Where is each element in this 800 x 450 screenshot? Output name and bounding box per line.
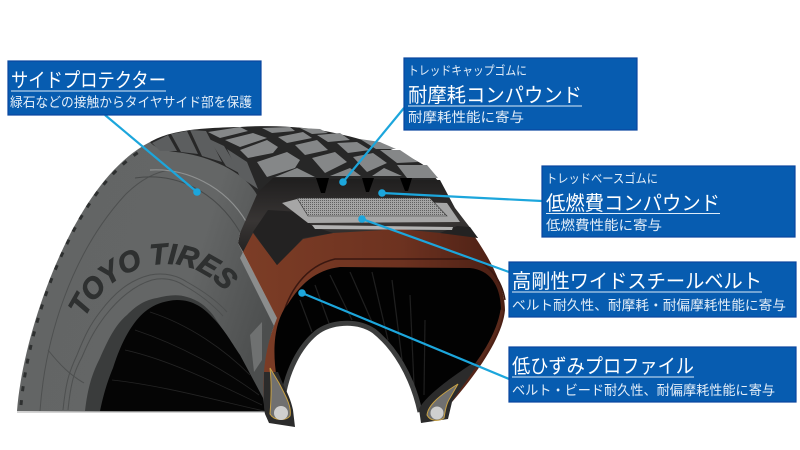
callout: tread cap compound: [339, 58, 637, 186]
description: 低燃費性能に寄与: [546, 217, 662, 233]
right sidewall ply: [462, 310, 502, 382]
callout: side protector: [8, 61, 261, 196]
shoulder lug blocks: [152, 130, 258, 189]
steel belt plate: [282, 199, 460, 223]
inner ply line: [281, 259, 505, 322]
leader line: [105, 115, 197, 192]
inner ply ridges in opening: [112, 312, 264, 411]
left rubber wedge: [253, 210, 333, 265]
description: ベルト・ビード耐久性、耐偏摩耗性能に寄与: [512, 383, 775, 398]
inner liner ribs: [300, 272, 425, 395]
tread cross-section: [238, 178, 478, 265]
sidewall edge lugs: [21, 150, 142, 405]
bead right: [419, 362, 479, 423]
sidewall ribs: [40, 170, 247, 411]
callout: low strain profile: [298, 289, 796, 402]
light edge along cut: [240, 252, 277, 326]
heading: サイドプロテクター: [11, 69, 166, 92]
brand lettering: [85, 264, 240, 318]
leader dot: [358, 215, 366, 223]
heading: 高剛性ワイドスチールベルト: [512, 270, 762, 293]
bottom cut line: [17, 411, 265, 413]
leader dot: [378, 189, 386, 197]
panel background: [8, 61, 261, 115]
panel background: [509, 347, 796, 402]
panel background: [404, 58, 637, 130]
panel background: [509, 262, 796, 317]
caption: トレッドキャップゴムに: [408, 63, 527, 78]
description: 耐摩耗性能に寄与: [408, 110, 524, 125]
heading: 低燃費コンパウンド: [546, 192, 720, 215]
inner rim edge: [284, 323, 420, 412]
heading: 低ひずみプロファイル: [512, 355, 694, 378]
bead left: [264, 368, 295, 427]
right rubber wedge: [440, 226, 478, 238]
description: ベルト耐久性、耐摩耗・耐偏摩耗性能に寄与: [512, 298, 786, 313]
lower sidewall panel: [250, 322, 262, 372]
description: 緑石などの接触からタイヤサイド部を保護: [10, 95, 252, 110]
sidewall: [17, 142, 300, 412]
wheel opening rim: [85, 295, 265, 411]
leader line: [302, 293, 509, 379]
leader dot: [339, 178, 347, 186]
steel belt mesh: [297, 198, 447, 216]
wheel opening: [100, 300, 265, 411]
leader dot: [298, 289, 306, 297]
carcass ply: [243, 200, 505, 404]
heading: 耐摩耗コンパウンド: [408, 84, 582, 107]
leader line: [382, 193, 542, 201]
leader dot: [193, 188, 201, 196]
tread grooves: [316, 178, 412, 193]
callout: tread base compound: [378, 166, 795, 237]
tire cavity: [274, 267, 501, 423]
tire illustration: TOYO TIRES: [68, 242, 238, 314]
tread surface: [150, 126, 440, 195]
lower belt strip: [312, 225, 453, 230]
wheel-side white arch: [286, 324, 422, 445]
panel background: [542, 166, 795, 237]
tire illustration: [17, 126, 506, 427]
callout: high rigidity wide steel belt: [358, 215, 796, 317]
leader line: [362, 219, 509, 272]
tread blocks: [208, 127, 438, 178]
caption: トレッドベースゴムに: [546, 171, 658, 186]
leader line: [343, 108, 404, 182]
